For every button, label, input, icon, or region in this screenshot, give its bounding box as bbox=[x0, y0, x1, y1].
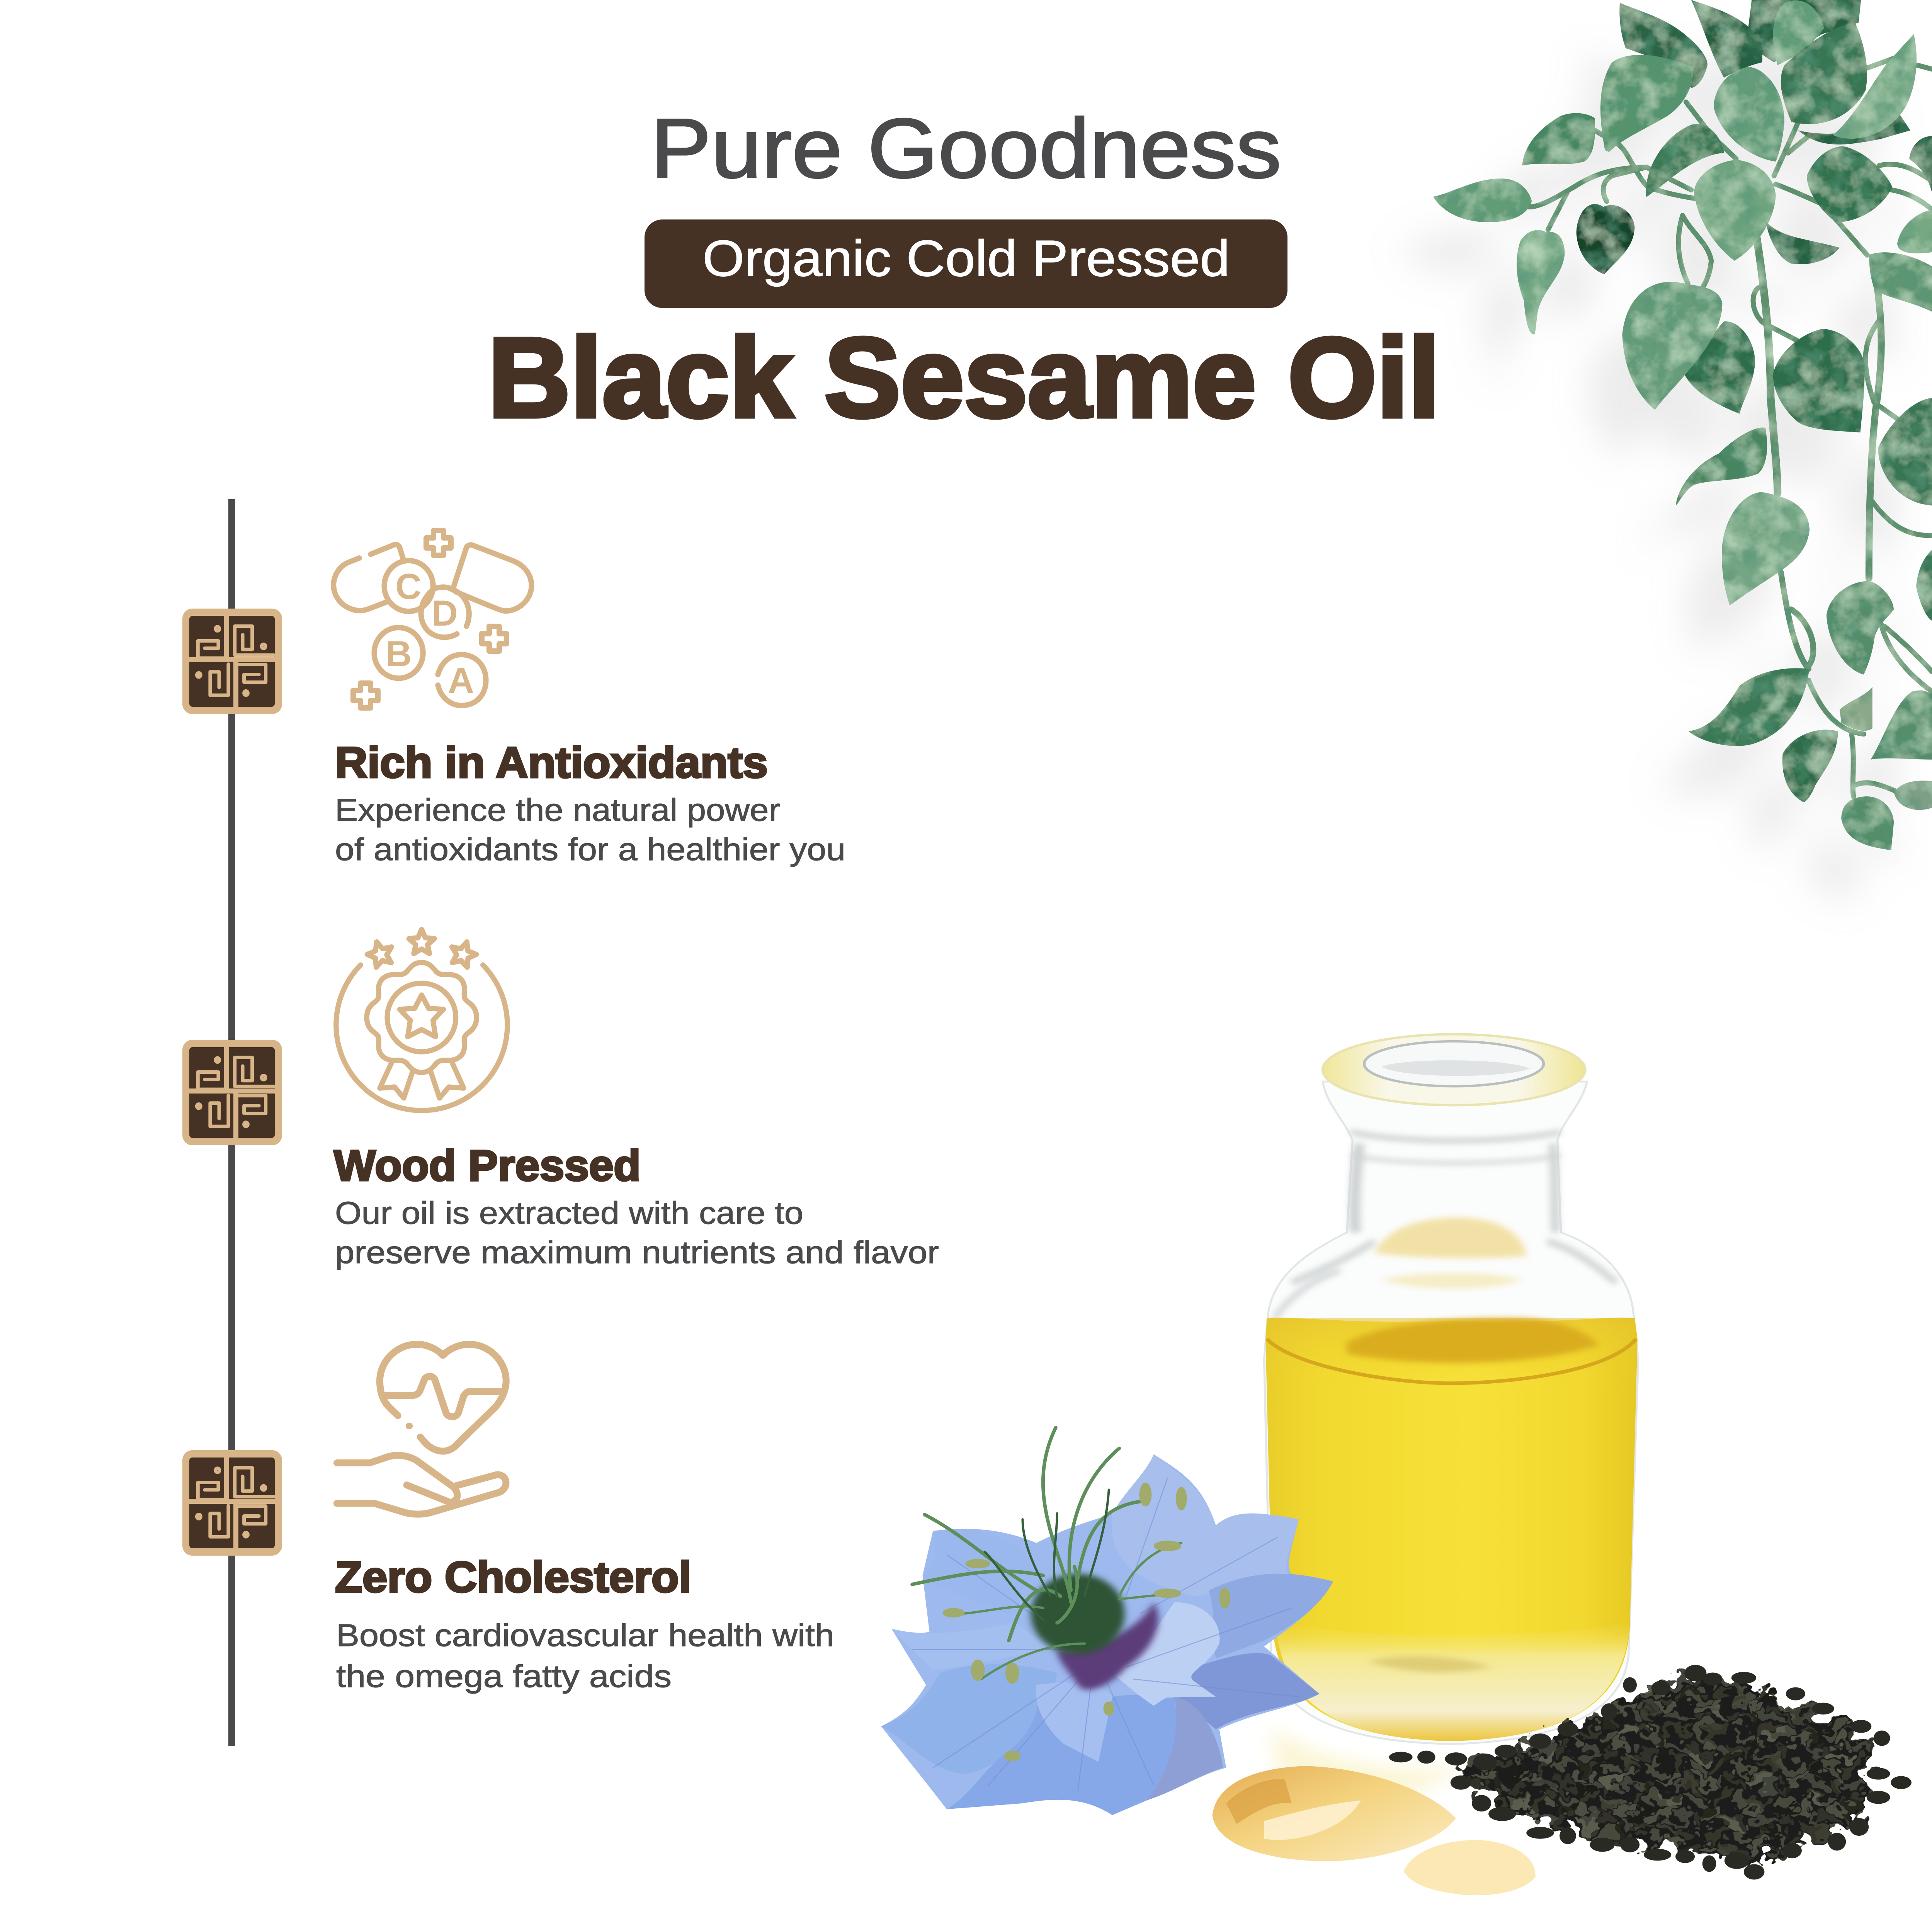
illustration: black seeds bbox=[1389, 1665, 1912, 1879]
text: antioxidants description: of antioxidants for a healthier you bbox=[335, 832, 845, 867]
text: antioxidants description bbox=[335, 793, 845, 867]
petals bbox=[881, 1454, 1333, 1815]
bottle floor sheen bbox=[1271, 1726, 1471, 1798]
reflection in shoulder bbox=[1374, 1218, 1526, 1258]
heading: Black Sesame Oil: Black Sesame Oil bbox=[488, 315, 1440, 440]
small drop bbox=[1403, 1840, 1536, 1895]
icon: heart in hand bbox=[337, 1344, 506, 1514]
badge: Organic Cold Pressed bbox=[645, 219, 1287, 308]
oil base highlight bbox=[1275, 1620, 1630, 1741]
text: wood pressed description bbox=[335, 1196, 939, 1270]
illustration: oil bottle bbox=[1264, 1034, 1638, 1798]
illustration: oil drops bbox=[1213, 1766, 1536, 1895]
text: antioxidants description: Experience the natural power bbox=[335, 793, 780, 828]
oil depth bbox=[1267, 1318, 1638, 1596]
title: Pure Goodness: Pure Goodness bbox=[651, 102, 1281, 196]
icon: award rosette bbox=[336, 929, 507, 1111]
flower green centre bbox=[1031, 1574, 1125, 1654]
badge: Organic Cold Pressed: Organic Cold Pressed bbox=[702, 230, 1230, 287]
bottle glass body bbox=[1264, 1082, 1638, 1744]
heading: Rich in Antioxidants: Rich in Antioxidants bbox=[335, 738, 768, 787]
meniscus line bbox=[1267, 1339, 1636, 1383]
icon: vitamin capsules: A bbox=[448, 660, 474, 701]
flower purple centre bbox=[1057, 1602, 1158, 1690]
text: wood pressed description: Our oil is extracted with care to bbox=[335, 1196, 803, 1231]
sediment glare bbox=[1368, 1656, 1492, 1672]
reflection band bbox=[1381, 1273, 1523, 1289]
text: zero cholesterol description bbox=[336, 1618, 834, 1694]
text: zero cholesterol description: the omega fatty acids bbox=[336, 1659, 672, 1694]
glass shading bbox=[1274, 1132, 1616, 1318]
petal base silhouette bbox=[881, 1454, 1333, 1815]
bottle opening bbox=[1364, 1041, 1544, 1086]
scattered seeds bbox=[1389, 1665, 1912, 1879]
oil body bbox=[1265, 1318, 1638, 1741]
illustration: blue nigella flower bbox=[881, 1428, 1333, 1815]
icon: vitamin capsules bbox=[333, 531, 532, 708]
illustration: hanging vine leaves bbox=[1433, 0, 1932, 850]
text: wood pressed description: preserve maximum nutrients and flavor bbox=[335, 1235, 939, 1270]
vine shadow bbox=[1398, 50, 1897, 900]
seed pile bbox=[1458, 1678, 1871, 1862]
timeline marker 3 bbox=[182, 1450, 282, 1556]
opening reflection bbox=[1381, 1060, 1530, 1076]
icon: vitamin capsules: C bbox=[395, 566, 422, 607]
text: zero cholesterol description: Boost cardiovascular health with bbox=[336, 1618, 834, 1653]
oil surface bbox=[1347, 1318, 1599, 1363]
icon: vitamin capsules: B bbox=[386, 633, 412, 674]
bottle lip bbox=[1323, 1034, 1585, 1105]
seed pods bbox=[942, 1483, 1230, 1761]
timeline marker 2 bbox=[182, 1040, 282, 1145]
timeline line bbox=[228, 499, 235, 1746]
icon: vitamin capsules: D bbox=[432, 593, 458, 633]
heading: Zero Cholesterol: Zero Cholesterol bbox=[335, 1553, 691, 1601]
stamens bbox=[912, 1428, 1181, 1679]
timeline marker 1 bbox=[182, 609, 282, 714]
heading: Wood Pressed: Wood Pressed bbox=[334, 1141, 641, 1190]
large drop bbox=[1213, 1766, 1456, 1861]
petal veins bbox=[912, 1478, 1299, 1791]
